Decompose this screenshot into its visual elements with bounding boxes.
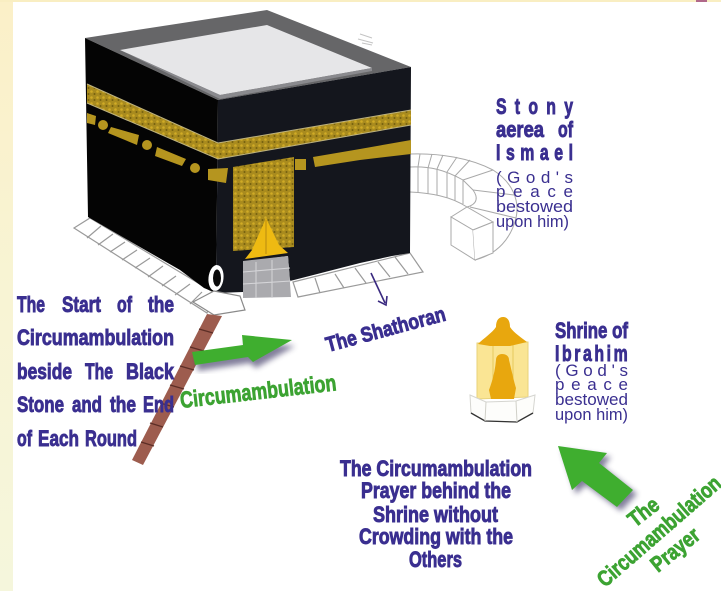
roof	[85, 10, 411, 100]
corner tile under the Black Stone	[193, 291, 245, 315]
label: Stony area of Ismael: (God's	[496, 168, 573, 187]
label: Stony area of Ismael: Ismael	[496, 142, 573, 166]
label: The Shathoran: The Shathoran	[323, 303, 448, 357]
Kaaba cube	[85, 10, 411, 298]
text: start of the circumambulation: of	[17, 426, 32, 451]
text: start of the circumambulation: the	[148, 292, 174, 317]
text: start of the circumambulation: and	[72, 392, 102, 417]
golden door ornament	[245, 218, 288, 259]
text: prayer behind the shrine	[340, 456, 532, 572]
label: Stony area of Ismael: aerea	[496, 117, 545, 142]
text: start of the circumambulation: of	[117, 292, 132, 317]
text: start of the circumambulation: Black	[126, 359, 175, 384]
label: Shrine of Ibrahim: Ibrahim	[555, 343, 628, 367]
label: Shrine of Ibrahim: (God's	[555, 361, 628, 380]
left face	[85, 38, 218, 293]
kiswa gold band	[87, 84, 218, 159]
text: start of the circumambulation: the	[110, 392, 136, 417]
brick path: start line	[132, 314, 222, 465]
text: start of the circumambulation	[17, 292, 175, 451]
text: start of the circumambulation: Each	[38, 426, 79, 451]
text: start of the circumambulation: Round	[85, 426, 137, 451]
label: Shrine of Ibrahim: Shrine of	[555, 318, 629, 343]
green arrow: circumambulation direction	[192, 335, 295, 371]
label: Shrine of Ibrahim: upon him)	[555, 405, 628, 424]
text: start of the circumambulation: End	[143, 392, 174, 417]
text: start of the circumambulation: Start	[62, 292, 102, 317]
label: Stony area of Ismael: bestowed	[496, 197, 573, 216]
icon: Shrine of Ibrahim	[470, 317, 535, 422]
text: prayer behind the shrine: Shrine without	[373, 502, 499, 527]
label: Shrine of Ibrahim: peace	[555, 375, 628, 394]
label: The Circumambulation Prayer: Prayer	[645, 522, 705, 577]
text: start of the circumambulation: The	[17, 292, 45, 317]
label: Shrine of Ibrahim	[555, 318, 629, 424]
band inscriptions	[87, 113, 411, 183]
label: Stony area of Ismael	[496, 96, 573, 231]
label: The Circumambulation Prayer: The	[623, 492, 664, 532]
pavement tiles around the Kaaba	[74, 218, 423, 313]
arrow: to the Shathoran	[371, 273, 387, 305]
label: Stony area of Ismael: Stony	[496, 96, 573, 120]
Black Stone	[207, 264, 225, 292]
door curtain	[233, 157, 294, 251]
text: start of the circumambulation: The	[85, 359, 113, 384]
label: Stony area of Ismael: upon him)	[496, 212, 569, 231]
text: prayer behind the shrine: Others	[409, 547, 462, 572]
text: prayer behind the shrine: Crowding with the	[359, 524, 513, 549]
right face	[216, 67, 411, 293]
text: start of the circumambulation: beside	[17, 359, 72, 384]
door stones	[243, 256, 291, 298]
label: Circumambulation: Circumambulation	[179, 369, 338, 413]
label: Stony area of Ismael: of	[558, 117, 573, 142]
green arrow: circumambulation prayer	[558, 446, 637, 511]
text: start of the circumambulation: Circumambulation	[17, 325, 174, 350]
text: start of the circumambulation: Stone	[17, 392, 64, 417]
text: prayer behind the shrine: Prayer behind the	[361, 478, 511, 503]
label: Shrine of Ibrahim: bestowed	[555, 390, 628, 409]
label: Stony area of Ismael: peace	[496, 182, 573, 201]
stony area of Ismael: curved wall	[358, 34, 517, 260]
text: prayer behind the shrine: The Circumambulation	[340, 456, 532, 481]
